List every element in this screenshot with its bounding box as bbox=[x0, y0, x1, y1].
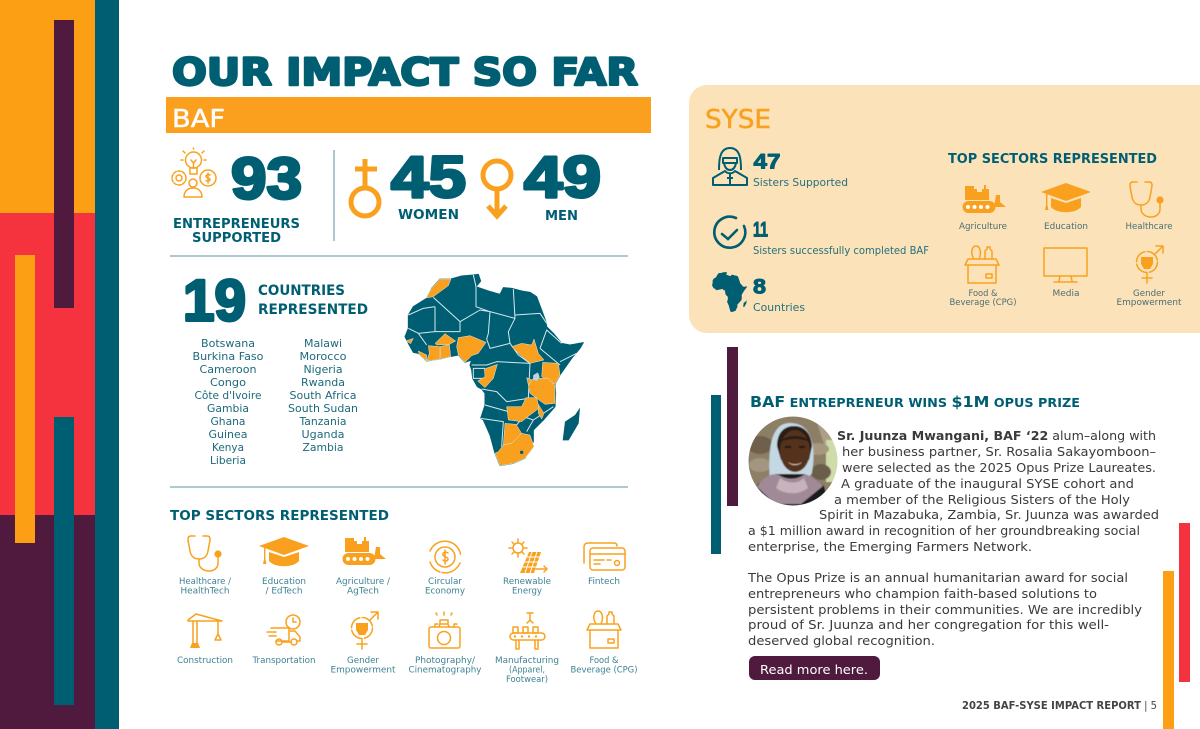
country list: Congo bbox=[210, 376, 246, 389]
sector: circular economy: Circular bbox=[428, 576, 463, 586]
stat: 45 women: 45 bbox=[391, 145, 466, 210]
sector: agriculture bbox=[336, 537, 390, 596]
stat: 8 countries bbox=[712, 272, 805, 314]
stat: 47 sisters: Sisters Supported bbox=[753, 178, 848, 189]
stat: 19 countries: 19 bbox=[183, 268, 246, 334]
sector: healthcare bbox=[179, 536, 231, 596]
sector: agriculture bbox=[959, 185, 1007, 231]
sector: manufacturing: Manufacturing bbox=[495, 655, 559, 665]
sector: healthcare: HealthTech bbox=[180, 586, 230, 596]
sector: gender empowerment bbox=[330, 612, 396, 674]
article body text: The Opus Prize is an annual humanitarian award for social bbox=[747, 570, 1128, 585]
country list: Cameroon bbox=[200, 363, 257, 376]
sector grid: BAF bbox=[177, 536, 638, 684]
sector: food and beverage bbox=[570, 611, 638, 674]
sector: education bbox=[259, 537, 309, 596]
stat: 47 sisters bbox=[713, 148, 848, 189]
country list: Liberia bbox=[210, 454, 246, 467]
article body text: a $1 million award in recognition of her groundbreaking social bbox=[748, 523, 1140, 538]
sector: education: Education bbox=[1044, 221, 1088, 231]
heading: top sectors (SYSE): TOP SECTORS REPRESENTED bbox=[948, 152, 1157, 167]
sector: manufacturing: Footwear) bbox=[506, 674, 548, 684]
article heading: BAF ENTREPRENEUR WINS $1M OPUS PRIZE bbox=[750, 393, 1080, 411]
sector: healthcare bbox=[1126, 182, 1172, 231]
article body text: were selected as the 2025 Opus Prize Laureates. bbox=[842, 460, 1156, 475]
icon: mini Africa map bbox=[712, 272, 747, 312]
sector: photography: Photography/ bbox=[415, 655, 475, 665]
sector: healthcare: Healthcare bbox=[1126, 221, 1172, 231]
stat: 11 completed bbox=[714, 217, 929, 257]
stat: 11 completed: Sisters successfully completed BAF bbox=[753, 246, 929, 257]
stat: 93 entrepreneurs: SUPPORTED bbox=[192, 231, 281, 246]
stat: 8 countries: 8 bbox=[753, 276, 766, 298]
icon: female symbol bbox=[351, 159, 379, 216]
country list: Ghana bbox=[210, 415, 246, 428]
article body text: a member of the Religious Sisters of the Holy bbox=[834, 492, 1130, 507]
panel: SYSE bbox=[689, 85, 1200, 333]
country list: Burkina Faso bbox=[192, 350, 264, 363]
sector: education: Education bbox=[262, 576, 306, 586]
heading: SYSE: SYSE bbox=[705, 105, 771, 135]
button: read more bbox=[749, 656, 880, 680]
sector: food and beverage: Food & bbox=[590, 655, 619, 665]
sector: food and beverage: Beverage (CPG) bbox=[950, 297, 1016, 307]
country list: Uganda bbox=[302, 428, 344, 441]
sector: gender empowerment: Gender bbox=[1133, 288, 1166, 298]
title: OUR IMPACT SO FAR bbox=[172, 51, 638, 94]
sector: education bbox=[1041, 183, 1091, 231]
heading: top sectors (BAF): TOP SECTORS REPRESENTED bbox=[170, 508, 389, 524]
stat: 19 countries bbox=[183, 268, 368, 334]
article body text: persistent problems in their communities. We are incredibly bbox=[748, 602, 1142, 617]
sector: food and beverage: Beverage (CPG) bbox=[570, 664, 638, 674]
country list: South Africa bbox=[290, 389, 356, 402]
article body text: her business partner, Sr. Rosalia Sakayomboon– bbox=[842, 444, 1156, 459]
left decorative colour column bbox=[0, 0, 119, 729]
sector: agriculture: Agriculture / bbox=[336, 576, 390, 586]
map: Africa with represented countries highlighted bbox=[405, 274, 583, 466]
icon: male symbol bbox=[483, 161, 511, 216]
photo: Sr. Juunza Mwangani bbox=[747, 416, 840, 506]
article body text bbox=[747, 428, 1159, 648]
country list: Morocco bbox=[300, 350, 347, 363]
country list: Kenya bbox=[212, 441, 244, 454]
sector: manufacturing bbox=[495, 613, 559, 684]
sector: media: Media bbox=[1052, 288, 1080, 298]
sector: healthcare: Healthcare / bbox=[179, 576, 231, 586]
sector: transportation bbox=[251, 615, 316, 665]
article accent bars bbox=[711, 347, 1190, 729]
sector: photography bbox=[408, 612, 482, 674]
stat: 49 men: 49 bbox=[524, 145, 601, 210]
footer: 2025 BAF-SYSE IMPACT REPORT | 5 bbox=[962, 700, 1157, 712]
country list: Gambia bbox=[207, 402, 249, 415]
button: read more: Read more here. bbox=[760, 662, 868, 677]
country list bbox=[192, 337, 358, 467]
BAF heading band: BAF bbox=[172, 104, 225, 133]
stat: 45 women bbox=[351, 145, 466, 223]
sector: food and beverage bbox=[950, 246, 1016, 307]
sector: fintech bbox=[584, 543, 625, 586]
country list: Rwanda bbox=[301, 376, 345, 389]
country list: Guinea bbox=[208, 428, 248, 441]
article body text: proud of Sr. Juunza and her congregation for this well- bbox=[748, 617, 1109, 632]
sector: fintech: Fintech bbox=[588, 576, 620, 586]
country list: Côte d'Ivoire bbox=[194, 389, 262, 402]
article body text: Sr. Juunza Mwangani, BAF ‘22 alum–along with bbox=[837, 428, 1156, 443]
sector: agriculture: AgTech bbox=[347, 586, 379, 596]
country list: Nigeria bbox=[304, 363, 342, 376]
stat: 8 countries: Countries bbox=[753, 303, 805, 314]
sector: agriculture: Agriculture bbox=[959, 221, 1007, 231]
stat: 49 men bbox=[483, 145, 601, 224]
sector: gender empowerment: Gender bbox=[347, 655, 380, 665]
country list: Malawi bbox=[304, 337, 342, 350]
stat: 11 completed: 11 bbox=[753, 218, 768, 242]
country list: Botswana bbox=[201, 337, 255, 350]
sector: gender empowerment bbox=[1116, 246, 1182, 307]
icon: entrepreneur bbox=[172, 148, 216, 197]
sector: renewable energy: Energy bbox=[512, 586, 542, 596]
article body text: Spirit in Mazabuka, Zambia, Sr. Juunza was awarded bbox=[819, 507, 1159, 522]
article body text: enterprise, the Emerging Farmers Network. bbox=[748, 539, 1032, 554]
sector: circular economy: Economy bbox=[425, 586, 465, 596]
stat: 19 countries: COUNTRIES bbox=[258, 283, 345, 299]
article body text: A graduate of the inaugural SYSE cohort and bbox=[841, 476, 1134, 491]
stat: 47 sisters: 47 bbox=[754, 150, 780, 174]
stat: 93 entrepreneurs: ENTREPRENEURS bbox=[173, 217, 300, 232]
BAF heading band bbox=[166, 97, 651, 133]
country list: Tanzania bbox=[299, 415, 346, 428]
sector: circular economy bbox=[425, 541, 465, 596]
sector: education: / EdTech bbox=[266, 586, 302, 596]
country list: South Sudan bbox=[288, 402, 358, 415]
sector: transportation: Transportation bbox=[251, 655, 316, 665]
country list: Zambia bbox=[302, 441, 344, 454]
stat: 45 women: WOMEN bbox=[398, 207, 459, 223]
sector: renewable energy bbox=[503, 539, 551, 596]
sector: media bbox=[1044, 248, 1087, 298]
icon: sister bbox=[713, 148, 747, 185]
stat: 93 entrepreneurs: 93 bbox=[231, 146, 302, 212]
sector: food and beverage: Food & bbox=[968, 288, 998, 298]
stat: 19 countries: REPRESENTED bbox=[258, 302, 368, 318]
sector: gender empowerment: Empowerment bbox=[330, 664, 396, 674]
sector: renewable energy: Renewable bbox=[503, 576, 551, 586]
article body text: deserved global recognition. bbox=[748, 633, 935, 648]
article body text: entrepreneurs who champion faith-based solutions to bbox=[748, 586, 1097, 601]
sector: photography: Cinematography bbox=[408, 664, 482, 674]
sector: construction bbox=[177, 614, 233, 665]
sector: manufacturing: (Apparel, bbox=[509, 664, 545, 674]
stat: 93 entrepreneurs bbox=[172, 146, 302, 246]
icon: check circle bbox=[714, 217, 745, 248]
stat: 49 men: MEN bbox=[545, 208, 578, 224]
sector: construction: Construction bbox=[177, 655, 233, 665]
sector: gender empowerment: Empowerment bbox=[1116, 297, 1182, 307]
